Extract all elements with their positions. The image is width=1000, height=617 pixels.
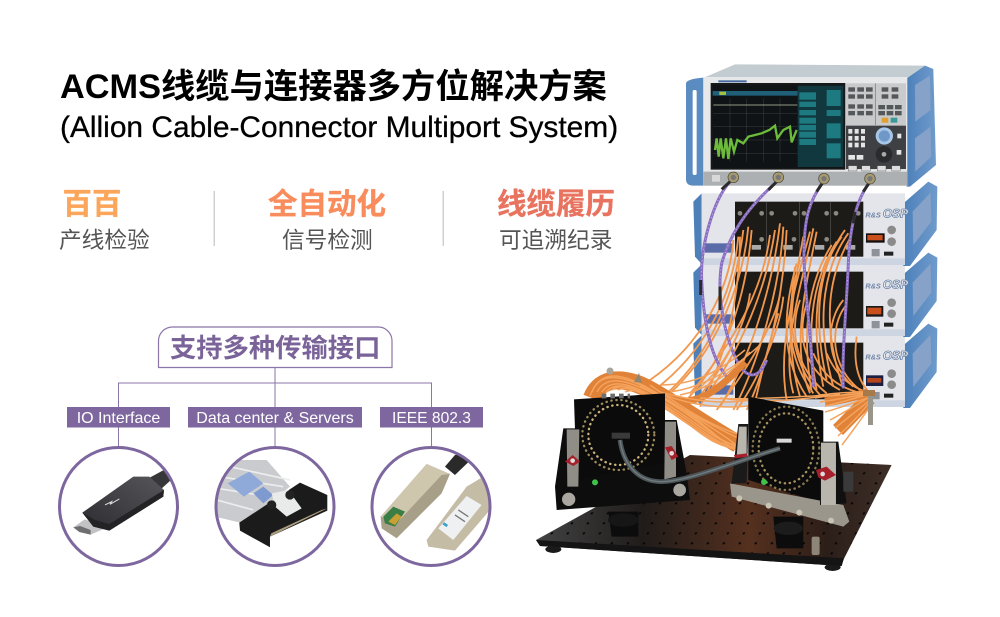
stat: 百百 产线检验: 产线检验 <box>59 227 150 253</box>
instrument screen <box>711 83 845 170</box>
icon: ribbon cable connector <box>215 448 334 566</box>
interface tree connector lines <box>118 367 432 446</box>
heading box: 支持多种传输接口 <box>158 327 392 368</box>
photo: OSP switch unit 2 <box>693 253 937 337</box>
photo: left fixture with test board <box>555 393 690 510</box>
stat: 全自动化 信号检测: 全自动化 <box>268 188 386 221</box>
photo: OSP switch unit 2: R&S OSP <box>865 277 909 291</box>
photo: grey jumper cable between fixtures <box>620 440 780 482</box>
photo: OSP switch unit 3 <box>693 324 937 408</box>
stat: 百百 产线检验: 百百 <box>62 188 122 221</box>
instrument keypad <box>846 83 906 171</box>
icon: USB-C Thunderbolt connector <box>60 448 178 566</box>
photo: orange and purple test cables <box>650 172 875 410</box>
icon: SFP transceiver modules <box>372 448 492 566</box>
stat: 线缆履历 可追溯纪录 <box>497 188 615 253</box>
photo: vector network analyzer <box>686 64 936 187</box>
title: ACMS线缆与连接器多方位解决方案 <box>60 68 607 106</box>
stat: 线缆履历 可追溯纪录: 线缆履历 <box>497 188 615 221</box>
heading box: 支持多种传输接口: 支持多种传输接口 <box>170 333 380 363</box>
label: IEEE 802.3: IEEE 802.3 <box>392 410 471 427</box>
photo: OSP switch unit 3: R&S OSP <box>865 348 909 362</box>
label: Data center & Servers: Data center & Servers <box>196 410 354 427</box>
stat: 全自动化 信号检测: 信号检测 <box>282 227 373 253</box>
stat: 全自动化 信号检测 <box>268 188 386 253</box>
label: IEEE 802.3 <box>380 407 483 428</box>
photo: OSP switch unit 1 <box>693 182 937 266</box>
stat: 线缆履历 可追溯纪录: 可追溯纪录 <box>499 227 612 253</box>
photo: right fixture with test board <box>730 397 853 527</box>
infographic canvas <box>58 64 938 571</box>
photo: OSP switch unit 1: R&S OSP <box>865 206 909 220</box>
label: IO Interface: IO Interface <box>77 410 160 427</box>
subtitle: (Allion Cable-Connector Multiport System) <box>60 111 618 144</box>
photo: test plate with feet <box>536 455 892 571</box>
stat: 百百 产线检验 <box>59 188 150 253</box>
photo: cable bundles to fixtures <box>590 340 872 452</box>
label: IO Interface <box>67 407 170 428</box>
photo: cable clamps and studs <box>606 368 875 425</box>
